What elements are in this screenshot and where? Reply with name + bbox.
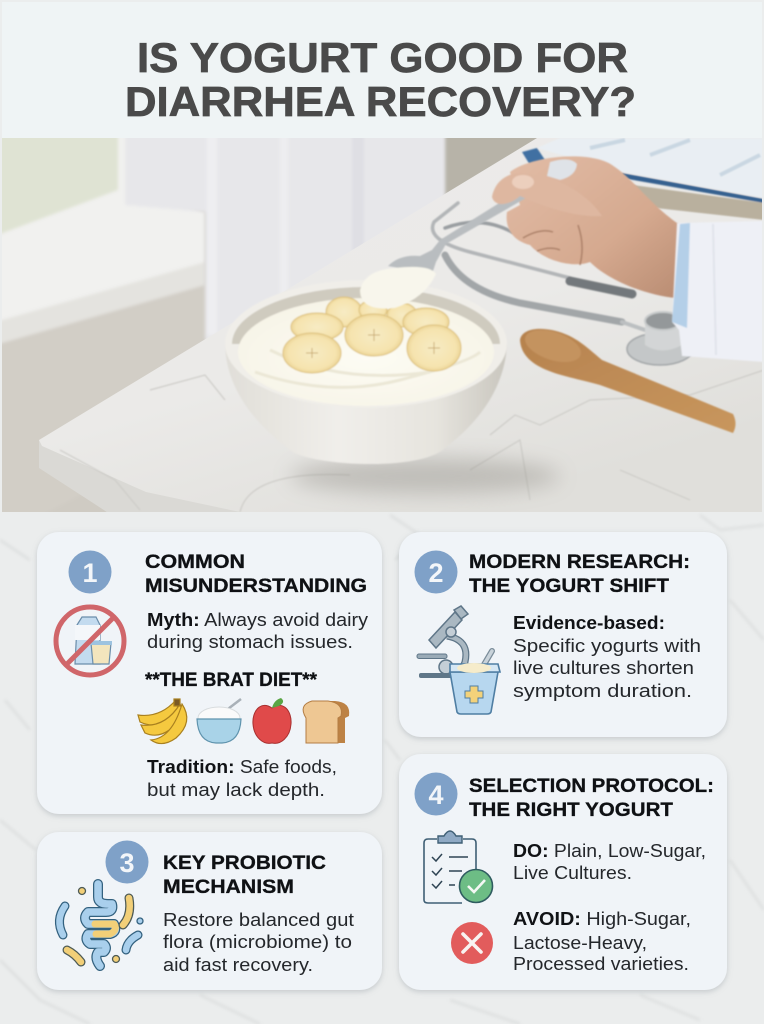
icon: avoid cross [451, 922, 493, 964]
avoid text: Lactose-Heavy, [513, 933, 647, 953]
evidence text: Specific yogurts with [513, 636, 701, 656]
stethoscope [432, 203, 693, 365]
heading 3 [163, 853, 326, 898]
badge 1: 1 [82, 558, 98, 588]
badge 1 [68, 550, 112, 594]
heading 4 [469, 776, 714, 821]
title banner [2, 2, 762, 138]
icon: microscope and yogurt cup [417, 606, 500, 714]
avoid text: AVOID: High-Sugar, [513, 909, 691, 929]
heading 4: THE RIGHT YOGURT [469, 800, 673, 821]
heading 1 [145, 552, 367, 597]
icon: no dairy [56, 607, 124, 675]
hand holding spoon [507, 156, 680, 298]
myth text: Myth: Always avoid dairy [147, 610, 368, 630]
icon: checklist clipboard [424, 831, 492, 903]
probiotic text: Restore balanced gut [163, 910, 354, 930]
icon: rice bowl [197, 699, 241, 743]
tradition text: but may lack depth. [147, 780, 325, 800]
heading 3: KEY PROBIOTIC [163, 853, 326, 874]
icon: gut and microbes [59, 884, 143, 966]
panel 2: modern research [399, 532, 727, 737]
evidence text: Evidence-based: [513, 613, 665, 633]
heading 2 [469, 552, 690, 597]
yogurt bowl [225, 280, 507, 464]
heading 1: MISUNDERSTANDING [145, 576, 367, 597]
heading 2: THE YOGURT SHIFT [469, 576, 669, 597]
wooden spoon [520, 324, 736, 433]
doctor's coat sleeve [672, 221, 764, 362]
icon: bananas [138, 699, 187, 744]
badge 4 [414, 772, 458, 816]
curtain and back wall [125, 130, 551, 345]
heading 2: MODERN RESEARCH: [469, 552, 690, 573]
badge 2: 2 [428, 558, 444, 588]
avoid text [513, 909, 691, 974]
title text [125, 34, 636, 125]
badge 3: 3 [119, 848, 135, 878]
heading 1: COMMON [145, 552, 245, 573]
title text: DIARRHEA RECOVERY? [125, 78, 636, 125]
do text: Live Cultures. [513, 863, 632, 883]
brat diet heading: **THE BRAT DIET** [145, 670, 318, 691]
panel 4: selection protocol [399, 754, 727, 990]
tradition text: Tradition: Safe foods, [147, 757, 337, 777]
myth text: during stomach issues. [147, 632, 353, 652]
probiotic text: flora (microbiome) to [163, 932, 352, 952]
panel 3: probiotic mechanism [37, 832, 382, 990]
do text [513, 841, 706, 883]
icon: apple [253, 698, 291, 743]
avoid text: Processed varieties. [513, 954, 689, 974]
silver spoon with yogurt [360, 159, 602, 309]
panel 1: common misunderstanding [37, 532, 382, 814]
tradition text [147, 757, 337, 800]
banana slices [283, 297, 461, 373]
evidence text [513, 613, 701, 701]
medical book [522, 138, 764, 220]
probiotic text: aid fast recovery. [163, 955, 313, 975]
evidence text: live cultures shorten [513, 658, 694, 678]
hero photo: yogurt bowl with banana on marble counter [0, 130, 764, 540]
heading 4: SELECTION PROTOCOL: [469, 776, 714, 797]
heading 3: MECHANISM [163, 877, 294, 898]
probiotic text [163, 910, 354, 975]
do text: DO: Plain, Low-Sugar, [513, 841, 706, 861]
evidence text: symptom duration. [513, 681, 692, 701]
title text: IS YOGURT GOOD FOR [137, 34, 628, 81]
myth text [147, 610, 368, 652]
window and sill [2, 138, 205, 344]
icon: toast [303, 701, 349, 743]
badge 4: 4 [428, 780, 444, 810]
badge 3 [106, 840, 148, 884]
badge 2 [414, 550, 458, 594]
marble counter [39, 138, 764, 512]
